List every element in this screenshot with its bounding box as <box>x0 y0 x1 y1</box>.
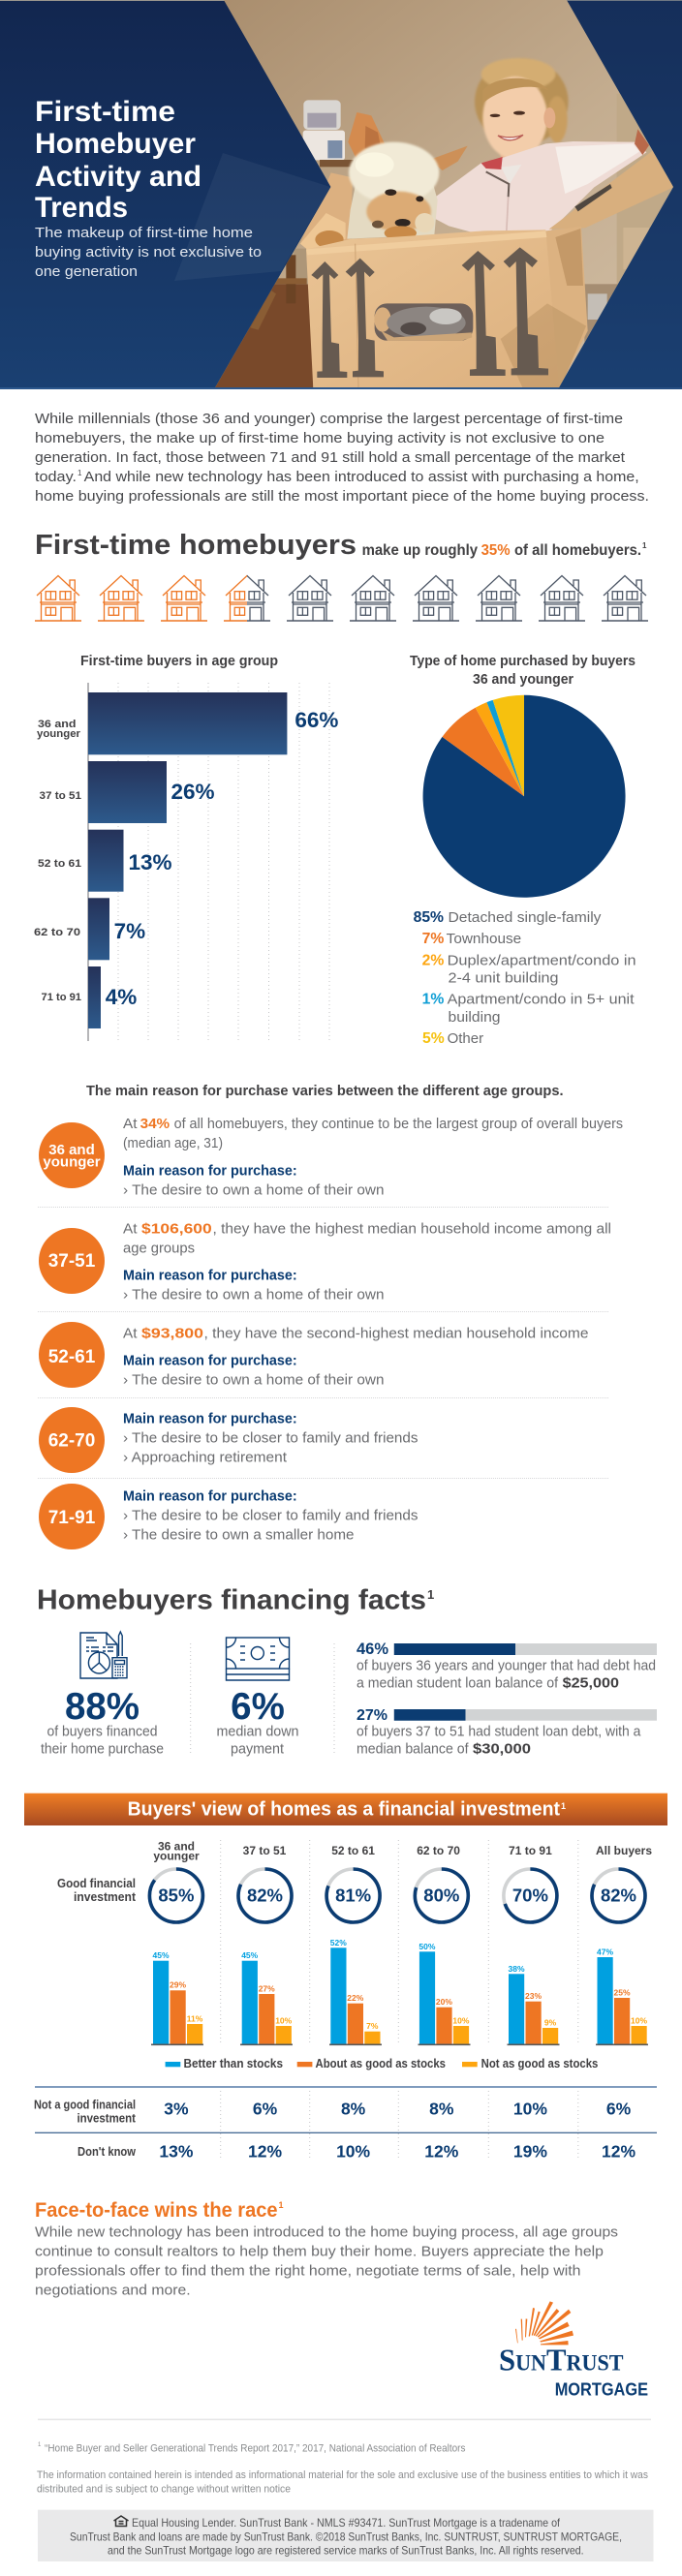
bar chart: first-time buyers by age group <box>34 683 338 1041</box>
column headers: 36 and <box>158 1840 195 1854</box>
disclaimer: distributed and is subject to change without written notice <box>37 2484 291 2496</box>
stat: 6% down payment <box>217 1686 298 1758</box>
icon: equal housing <box>114 2516 128 2526</box>
logo: SunTrust Mortgage: MORTGAGE <box>555 2379 648 2399</box>
donut: 71 to 91 70% <box>504 1869 557 1922</box>
hero title <box>35 96 202 224</box>
bars: 52 to 61: 52% <box>330 1938 347 1947</box>
row: 37-51: , they have the highest median household income among all <box>213 1220 611 1237</box>
stat: 88% financed: 88% <box>65 1686 140 1728</box>
stat: 88% financed: their home purchase <box>41 1741 164 1758</box>
row: 52-61: Main reason for purchase: <box>123 1352 297 1368</box>
column headers: 62 to 70 <box>417 1844 460 1857</box>
heading: homebuyers financing facts: 1 <box>427 1587 434 1602</box>
badge: 36 and younger: 36 and <box>48 1142 95 1158</box>
hero subtitle: one generation <box>35 263 138 280</box>
intro paragraph: 1 <box>78 469 82 477</box>
row: 52-61: › The desire to own a home of their own <box>123 1371 384 1388</box>
row: 62-70: › The desire to be closer to family and friends <box>123 1429 418 1446</box>
stat: 27% student debt: $30,000 <box>473 1740 531 1757</box>
stat: 46% student debt <box>356 1641 657 1691</box>
table rows: not good and don't know: 8% <box>429 2099 454 2118</box>
legal box <box>38 2510 653 2561</box>
pie legend: Duplex/apartment/condo in <box>448 953 636 968</box>
badge: 52-61: 52-61 <box>48 1347 96 1367</box>
badge: 36 and younger: younger <box>43 1154 101 1170</box>
bars: 37 to 51: 10% <box>275 2016 293 2026</box>
donut: 62 to 70 80% <box>415 1869 468 1922</box>
disclaimer: The information contained herein is intended as informational material for the sole and exclusive use of the business entities to which it was <box>37 2469 648 2481</box>
bars: 52 to 61 <box>329 1938 382 2045</box>
column headers: 71 to 91 <box>509 1844 552 1857</box>
legal box: and the SunTrust Mortgage logo are registered service marks of SunTrust Banks, Inc. All rights reserved. <box>108 2544 584 2558</box>
heading: first-time homebuyers share: 1 <box>642 541 647 550</box>
column headers <box>153 1840 652 1863</box>
row: 37-51: age groups <box>123 1240 195 1256</box>
icons: ten houses, 3.5 highlighted for 35% <box>35 575 648 621</box>
chart title: home type: Type of home purchased by buyers <box>410 653 636 669</box>
hero title: Activity and <box>35 161 202 193</box>
pie legend: Other <box>448 1030 483 1047</box>
bars: 36 and younger <box>151 1950 203 2045</box>
heading: first-time homebuyers share <box>35 530 647 561</box>
banner: buyers' view of homes: 1 <box>561 1801 566 1811</box>
bars: 71 to 91 <box>508 1964 560 2045</box>
row: 52-61: , they have the second-highest median household income <box>203 1325 589 1341</box>
table rows: not good and don't know: 10% <box>513 2099 547 2118</box>
bars: 71 to 91: 38% <box>508 1964 525 1974</box>
row: 62-70 <box>39 1407 418 1473</box>
badge: 71-91 <box>39 1484 105 1549</box>
logo: SunTrust Mortgage: SUNTRUST <box>499 2342 624 2377</box>
hero photo: child and dog in a moving box <box>194 0 682 390</box>
stat: 27% student debt: median balance of <box>356 1740 469 1757</box>
table rows: not good and don't know: 3% <box>164 2099 189 2118</box>
bars: 52 to 61: 7% <box>366 2021 379 2031</box>
bar chart: first-time buyers by age group: 36 and <box>38 719 76 730</box>
badge: 62-70 <box>39 1407 105 1473</box>
stat: 27% student debt: of buyers 37 to 51 had student loan debt, with a <box>356 1723 641 1739</box>
heading: first-time homebuyers share: make up roughly <box>362 542 478 559</box>
paragraph: realtors: professionals offer to find them the right home, negotiate terms of sale, help with <box>35 2262 581 2279</box>
bar chart: first-time buyers by age group: 71 to 91 <box>41 992 81 1003</box>
paragraph: realtors: While new technology has been introduced to the home buying process, all age groups <box>35 2223 618 2240</box>
bars: 36 and younger: 45% <box>152 1950 170 1960</box>
grouped bars: compared with stocks by age <box>151 1938 648 2045</box>
heading: face-to-face: 1 <box>279 2200 284 2210</box>
icon: document, pie and calculator <box>80 1632 127 1678</box>
row: 62-70: › Approaching retirement <box>123 1449 288 1465</box>
donut: 52 to 61 81% <box>326 1869 380 1922</box>
bars: 37 to 51: 27% <box>259 1983 275 1993</box>
stat: 46% student debt: 46% <box>356 1641 388 1658</box>
bars: 36 and younger: 11% <box>187 2014 203 2024</box>
intro paragraph: While millennials (those 36 and younger) comprise the largest percentage of first-time <box>35 411 623 427</box>
pie legend: 1% <box>422 992 444 1008</box>
disclaimer <box>37 2469 648 2496</box>
donut: 37 to 51 82%: 82% <box>247 1885 283 1906</box>
donut: 62 to 70 80%: 80% <box>423 1885 459 1906</box>
donut: 37 to 51 82% <box>238 1869 292 1922</box>
table rows: not good and don't know: 10% <box>336 2142 371 2162</box>
chart legend <box>166 2056 598 2070</box>
bars: 62 to 70: 20% <box>436 1997 452 2007</box>
intro paragraph <box>35 411 649 505</box>
donut: 36 and younger 85%: 85% <box>158 1885 194 1906</box>
bars: 36 and younger: 29% <box>170 1979 186 1989</box>
pie chart: type of home purchased <box>423 695 626 898</box>
bars: 71 to 91: 23% <box>525 1991 542 2001</box>
bars: 62 to 70: 50% <box>418 1942 436 1951</box>
hero title: Homebuyer <box>35 128 196 160</box>
row: 36 and younger <box>39 1116 623 1198</box>
column headers: 37 to 51 <box>243 1844 287 1857</box>
stat: 88% financed: of buyers financed <box>46 1724 157 1740</box>
bar chart: first-time buyers by age group: 37 to 51 <box>39 790 81 802</box>
table rows: not good and don't know: 12% <box>602 2142 636 2162</box>
badge: 36 and younger <box>39 1122 105 1188</box>
legal box: Equal Housing Lender. SunTrust Bank - NMLS #93471. SunTrust Mortgage is a tradename of <box>132 2516 561 2530</box>
row: 71-91: › The desire to own a smaller home <box>123 1526 355 1543</box>
pie legend <box>414 909 636 1047</box>
stat: 88% financed <box>41 1686 164 1758</box>
row: 36 and younger: (median age, 31) <box>123 1135 223 1151</box>
hero subtitle <box>35 225 262 280</box>
row label: good financial investment <box>57 1876 137 1904</box>
row: 37-51: At <box>123 1220 138 1237</box>
hero subtitle: The makeup of first-time home <box>35 225 253 241</box>
stat: 27% student debt: 27% <box>356 1707 388 1724</box>
table rows: not good and don't know: 12% <box>248 2142 282 2162</box>
row: 36 and younger: At <box>123 1116 138 1132</box>
bars: 37 to 51: 45% <box>241 1950 259 1960</box>
footnote: 1 <box>38 2442 42 2448</box>
column headers: younger <box>153 1850 200 1863</box>
chart legend: About as good as stocks <box>316 2056 446 2070</box>
bars: 37 to 51 <box>240 1950 293 2045</box>
bar chart: first-time buyers by age group: 26% <box>170 780 215 804</box>
bar chart: first-time buyers by age group: 52 to 61 <box>38 858 81 870</box>
heading: first-time homebuyers share: First-time homebuyers <box>35 530 356 561</box>
chart title: home type <box>410 653 636 688</box>
row: 37-51: › The desire to own a home of their own <box>123 1286 384 1303</box>
badge: 37-51 <box>39 1228 105 1294</box>
table rows: not good and don't know: 8% <box>341 2099 366 2118</box>
bar chart: first-time buyers by age group: 7% <box>114 919 145 943</box>
row: 71-91 <box>39 1484 418 1549</box>
hero title: Trends <box>35 192 128 224</box>
icon: banknote stack <box>227 1638 289 1680</box>
table rows: not good and don't know: 12% <box>424 2142 459 2162</box>
stat: 6% down payment: 6% <box>231 1686 285 1728</box>
donut: all buyers 82%: 82% <box>601 1885 636 1906</box>
bars: 71 to 91: 9% <box>544 2018 557 2028</box>
table rows: not good and don't know: Don't know <box>78 2144 137 2159</box>
stat: 46% student debt: of buyers 36 years and younger that had debt had <box>356 1657 656 1673</box>
pie legend: 7% <box>422 931 444 947</box>
stat: 46% student debt: a median student loan balance of <box>356 1674 559 1691</box>
row: 37-51 <box>39 1220 611 1303</box>
intro paragraph: homebuyers, the make up of first-time home buying activity is not exclusive to one <box>35 430 604 446</box>
stat: 6% down payment: median down <box>217 1724 298 1740</box>
bars: all buyers: 10% <box>631 2016 647 2026</box>
badge: 52-61 <box>39 1322 105 1388</box>
pie legend: 2-4 unit building <box>448 970 558 987</box>
pie legend: 5% <box>422 1030 445 1047</box>
heading: homebuyers financing facts: Homebuyers financing facts <box>37 1585 426 1616</box>
row: 36 and younger: 34% <box>140 1116 170 1132</box>
table rows: not good and don't know: investment <box>78 2110 137 2125</box>
logo: SunTrust Mortgage <box>499 2301 648 2399</box>
donut: 52 to 61 81%: 81% <box>335 1885 371 1906</box>
bars: 52 to 61: 22% <box>347 1993 364 2003</box>
badge: 71-91: 71-91 <box>48 1508 96 1528</box>
bars: 62 to 70 <box>418 1942 471 2045</box>
row: 52-61: At <box>123 1325 138 1341</box>
row: 36 and younger: of all homebuyers, they continue to be the largest group of overall buyers <box>174 1116 623 1132</box>
chart title: home type: 36 and younger <box>473 671 574 688</box>
banner: buyers' view of homes: Buyers' view of homes as a financial investment <box>128 1799 560 1821</box>
pie legend: building <box>448 1009 500 1026</box>
chart legend: Not as good as stocks <box>481 2056 598 2070</box>
paragraph: realtors: negotiations and more. <box>35 2282 191 2298</box>
pie legend: Townhouse <box>447 931 521 947</box>
heading: first-time homebuyers share: 35% <box>481 542 511 559</box>
row: 71-91: Main reason for purchase: <box>123 1487 297 1504</box>
row label: good financial investment: investment <box>74 1889 137 1904</box>
row: 71-91: › The desire to be closer to family and friends <box>123 1507 418 1523</box>
bars: all buyers: 25% <box>613 1987 631 1997</box>
hero banner <box>0 0 682 390</box>
stat: 6% down payment: payment <box>231 1741 285 1758</box>
donut: 36 and younger 85% <box>149 1869 202 1922</box>
chart title: age groups: First-time buyers in age group <box>80 653 278 669</box>
row: 36 and younger: › The desire to own a home of their own <box>123 1181 384 1198</box>
bars: 62 to 70: 10% <box>452 2016 470 2026</box>
paragraph: realtors: continue to consult realtors to help them buy their home. Buyers appreciate the help <box>35 2243 604 2259</box>
row: 36 and younger: Main reason for purchase: <box>123 1162 297 1179</box>
badge: 37-51: 37-51 <box>48 1251 96 1272</box>
table rows: not good and don't know: 6% <box>606 2099 632 2118</box>
row: 37-51: $106,600 <box>141 1220 212 1237</box>
hero subtitle: buying activity is not exclusive to <box>35 244 262 261</box>
row: 62-70: Main reason for purchase: <box>123 1410 297 1426</box>
heading: face-to-face: Face-to-face wins the race <box>35 2199 277 2222</box>
column headers: All buyers <box>596 1844 652 1857</box>
table rows: not good and don't know <box>34 2087 657 2162</box>
intro paragraph: generation. In fact, those between 71 and 91 still hold a small percentage of the market <box>35 449 626 466</box>
paragraph: realtors <box>35 2223 618 2298</box>
pie legend: 2% <box>422 953 444 968</box>
banner: buyers' view of homes <box>24 1794 667 1825</box>
stat: 27% student debt <box>356 1707 657 1757</box>
table rows: not good and don't know: 13% <box>159 2142 194 2162</box>
footnote: “Home Buyer and Seller Generational Trends Report 2017,” 2017, National Association of Realtors <box>45 2443 466 2455</box>
pie legend: 85% <box>414 909 444 926</box>
row: 52-61 <box>39 1322 589 1388</box>
bar chart: first-time buyers by age group: 66% <box>294 708 338 732</box>
table rows: not good and don't know: 19% <box>513 2142 547 2162</box>
chart legend: Better than stocks <box>184 2056 283 2070</box>
bars: all buyers <box>596 1947 648 2045</box>
bars: all buyers: 47% <box>597 1947 613 1956</box>
heading: first-time homebuyers share: of all homebuyers. <box>514 542 641 559</box>
icon: up arrows on box <box>311 247 548 378</box>
intro paragraph: And while new technology has been introduced to assist with purchasing a home, <box>84 469 639 485</box>
column headers: 52 to 61 <box>331 1844 375 1857</box>
table rows: not good and don't know: Not a good financial <box>34 2097 136 2111</box>
donut: 71 to 91 70%: 70% <box>512 1885 548 1906</box>
intro paragraph: today. <box>35 469 77 485</box>
heading: main reason for purchase: The main reason for purchase varies between the different age groups. <box>86 1083 564 1099</box>
row: 37-51: Main reason for purchase: <box>123 1267 297 1283</box>
badge: 62-70: 62-70 <box>48 1431 95 1451</box>
row label: good financial investment: Good financial <box>57 1876 136 1890</box>
bar chart: first-time buyers by age group: 62 to 70 <box>34 927 80 938</box>
donut: all buyers 82% <box>592 1869 645 1922</box>
pie legend: Apartment/condo in 5+ unit <box>448 992 635 1008</box>
bar chart: first-time buyers by age group: younger <box>37 728 81 740</box>
hero title: First-time <box>35 96 175 128</box>
stat: 46% student debt: $25,000 <box>563 1674 619 1691</box>
intro paragraph: home buying professionals are still the most important piece of the home buying process. <box>35 488 649 505</box>
pie legend: Detached single-family <box>448 909 602 926</box>
bar chart: first-time buyers by age group: 13% <box>128 850 172 874</box>
bar chart: first-time buyers by age group: 4% <box>106 985 137 1009</box>
row: 52-61: $93,800 <box>141 1325 203 1341</box>
table rows: not good and don't know: 6% <box>253 2099 278 2118</box>
